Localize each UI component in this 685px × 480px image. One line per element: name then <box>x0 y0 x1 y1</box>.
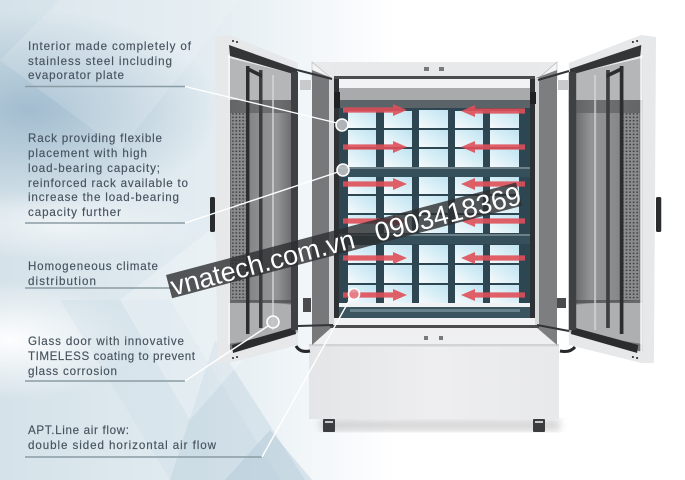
callout: stainless steel interior: stainless steel including <box>28 55 172 68</box>
shelves <box>339 167 530 244</box>
callout: glass door: Glass door with innovative <box>28 335 184 348</box>
callout: rack: capacity further <box>28 206 121 219</box>
callout: stainless steel interior: Interior made completely of <box>28 40 192 53</box>
storage boxes <box>348 110 519 303</box>
casters <box>323 419 545 432</box>
left door <box>210 35 298 363</box>
chamber floor <box>330 303 539 328</box>
callout leader lines <box>25 86 350 457</box>
watermark band: 0903418369 <box>371 180 524 248</box>
right door <box>569 35 661 363</box>
chamber interior <box>330 76 539 328</box>
callout: rack: placement with high <box>28 147 147 160</box>
callout marker circles <box>267 119 360 328</box>
callout: rack: Rack providing flexible <box>28 132 162 145</box>
callout: air flow: APT.Line air flow: <box>28 424 129 437</box>
callout: glass door: TIMELESS coating to prevent <box>28 350 196 363</box>
watermark band <box>165 180 524 302</box>
callout: stainless steel interior <box>28 40 192 82</box>
callout: air flow <box>28 424 217 452</box>
callout: glass door <box>28 335 196 378</box>
incubator cabinet <box>309 62 559 432</box>
air flow arrows <box>343 104 525 301</box>
watermark band: vnatech.com.vn <box>167 224 358 302</box>
callout: climate distribution: distribution <box>28 275 96 288</box>
callout: rack: load-bearing capacity; <box>28 162 160 175</box>
callout: air flow: double sided horizontal air flow <box>28 439 217 452</box>
chamber side walls <box>312 70 557 345</box>
callout: glass door: glass corrosion <box>28 365 117 378</box>
callout: climate distribution <box>28 260 158 288</box>
callout: rack: increase the load-bearing <box>28 191 179 204</box>
callout: stainless steel interior: evaporator plate <box>28 69 124 82</box>
hinges and cables <box>296 70 575 352</box>
cabinet body <box>309 62 559 419</box>
callout: climate distribution: Homogeneous climate <box>28 260 158 273</box>
callout: rack: reinforced rack available to <box>28 177 188 190</box>
callout: rack <box>28 132 188 219</box>
